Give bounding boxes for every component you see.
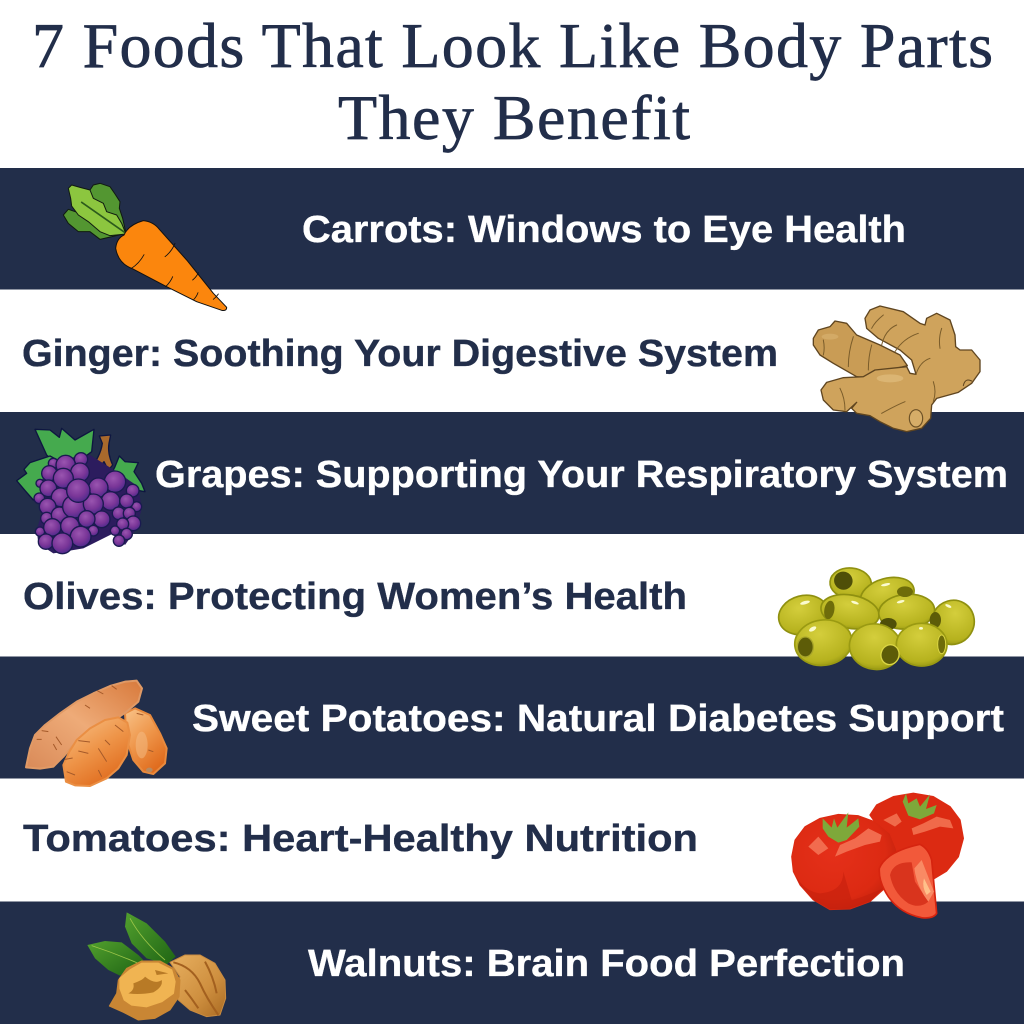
heading: ginger: Ginger: Soothing Your Digestive System: [22, 333, 778, 375]
back tomato calyx: [903, 793, 937, 819]
icon: carrot: [63, 183, 227, 311]
heading: sweet potatoes: Sweet Potatoes: Natural Diabetes Support: [192, 698, 1004, 740]
grape stem: [87, 435, 113, 479]
title: [32, 10, 993, 153]
heading: grapes: Grapes: Supporting Your Respiratory System: [155, 454, 1008, 496]
band: walnuts: [0, 902, 1024, 1024]
whole walnut: [170, 955, 226, 1017]
title: They Benefit: [338, 82, 690, 153]
icon: grapes: [17, 428, 145, 554]
grape cluster: [34, 453, 142, 554]
icon: tomatoes: [792, 793, 963, 918]
open walnut: [109, 961, 180, 1020]
front tomato calyx: [823, 812, 859, 843]
olive highlights: [800, 582, 952, 633]
band: sweet potatoes: [0, 656, 1024, 778]
front tomato: [792, 814, 897, 910]
grape leaves: [17, 428, 145, 500]
band: grapes: [0, 412, 1024, 534]
heading: tomatoes: Tomatoes: Heart-Healthy Nutrition: [23, 818, 698, 860]
title: 7 Foods That Look Like Body Parts: [32, 10, 993, 81]
walnut leaves: [87, 941, 143, 976]
band: carrots: [0, 168, 1024, 290]
back tomato: [870, 793, 963, 879]
olive back holes: [823, 569, 941, 630]
olive back row: [774, 566, 982, 652]
olive front row: [792, 616, 947, 674]
icon: walnuts: [87, 912, 226, 1020]
heading: carrots: Carrots: Windows to Eye Health: [302, 209, 906, 251]
tomato wedge: [879, 844, 937, 918]
icon: olives: [774, 566, 982, 674]
icon: sweet potatoes: [26, 681, 167, 786]
heading: walnuts: Walnuts: Brain Food Perfection: [308, 943, 905, 985]
olive front holes: [797, 635, 946, 667]
icon: ginger: [813, 306, 980, 432]
heading: olives: Olives: Protecting Women’s Health: [23, 576, 687, 618]
